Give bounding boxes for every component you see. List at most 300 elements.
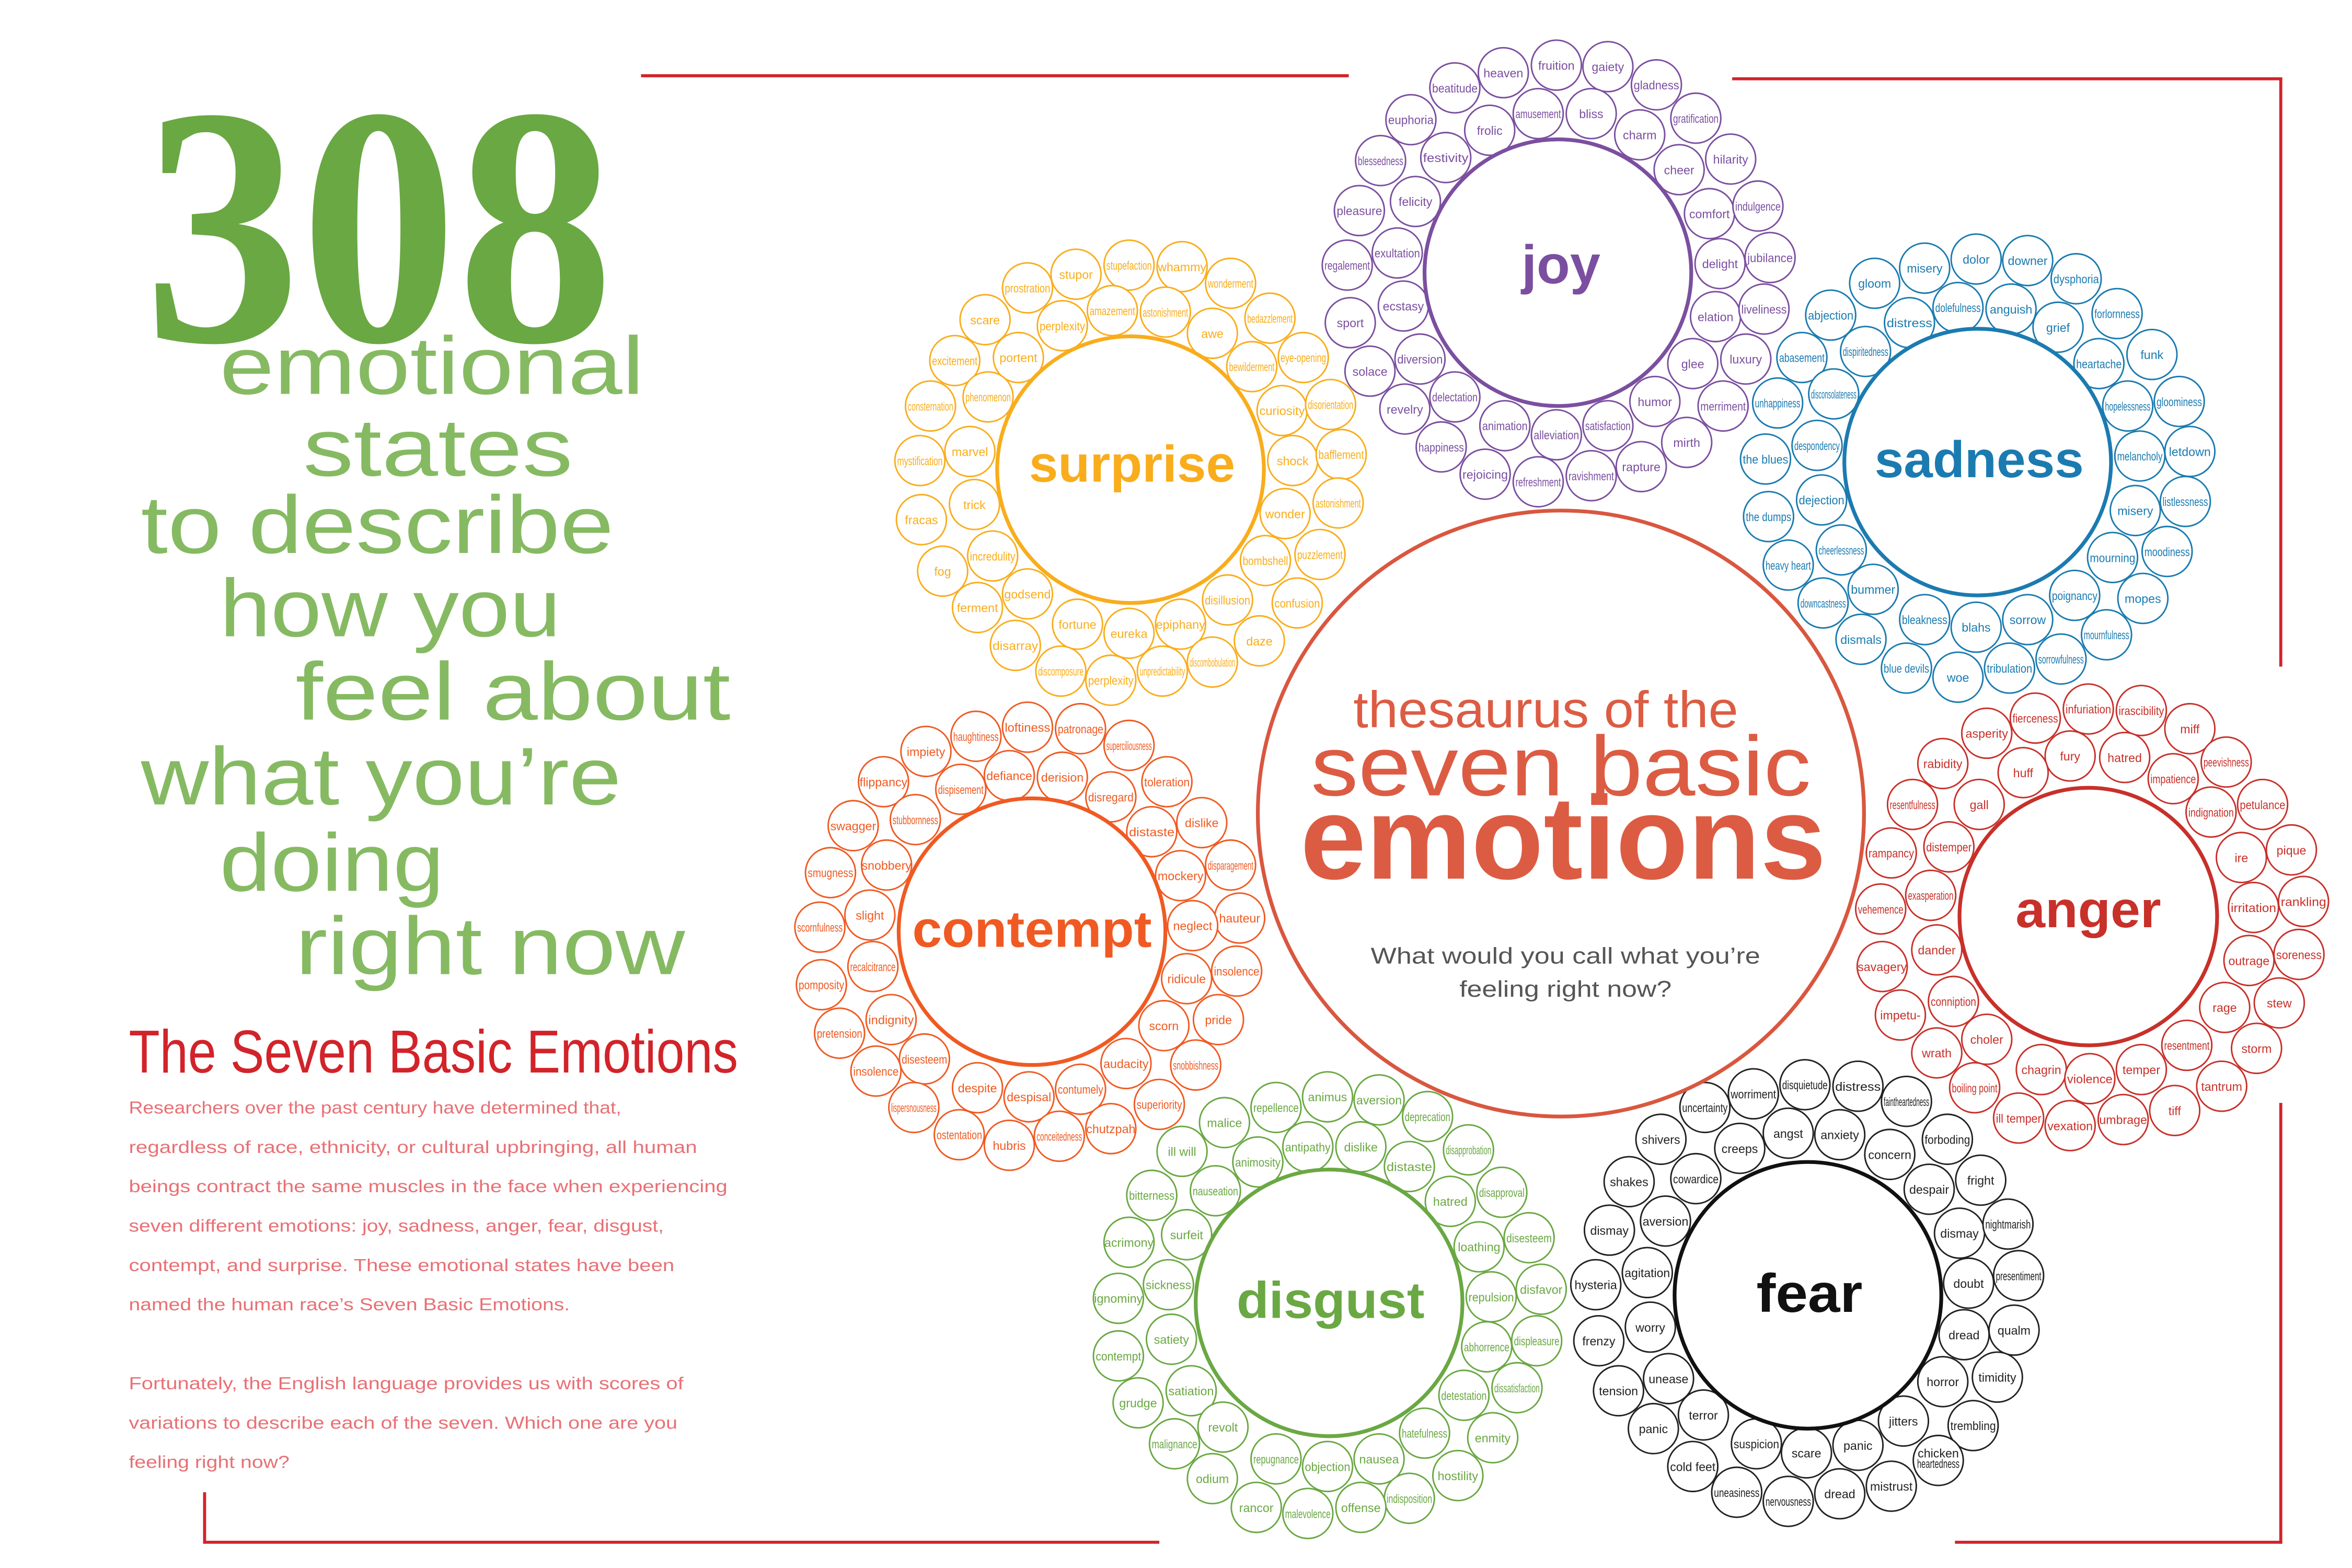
word bubbles: sadness: blahs	[1962, 621, 1991, 635]
word bubbles: surprise: astonishment	[1143, 306, 1189, 319]
word bubbles: joy: festivity	[1423, 151, 1469, 165]
paragraph text: named the human race’s Seven Basic Emotions.	[129, 1295, 570, 1315]
word bubbles: disgust: bitterness	[1129, 1189, 1174, 1203]
word bubbles: sadness: bummer	[1851, 583, 1896, 596]
circle: contempt	[898, 799, 1166, 1065]
word bubbles: fear: despair	[1909, 1183, 1949, 1196]
word bubbles: disgust: repulsion	[1469, 1290, 1514, 1304]
word bubbles: contempt: recalcitrance	[850, 960, 896, 974]
paragraph text: seven different emotions: joy, sadness, anger, fear, disgust,	[129, 1217, 664, 1236]
word bubbles: contempt: pomposity	[799, 978, 844, 992]
word bubbles: disgust: odium	[1196, 1472, 1229, 1486]
word bubbles: fear: anxiety	[1820, 1128, 1859, 1142]
word bubbles: joy: comfort	[1689, 207, 1730, 221]
word bubbles: anger: gall	[1970, 798, 1989, 812]
word bubbles: disgust: malevolence	[1285, 1507, 1331, 1520]
word bubbles: surprise: disillusion	[1205, 594, 1250, 607]
headline: emotional states to describe how you feel: emotional	[220, 320, 644, 412]
center circle: thesaurus of the seven basic emotions	[1258, 511, 1864, 1116]
word bubbles: surprise: eye-opening	[1281, 351, 1326, 365]
circle: sadness: sadness	[1875, 431, 2084, 488]
word bubbles: contempt: hubris	[993, 1139, 1026, 1152]
word bubbles: anger: conniption	[1931, 995, 1976, 1009]
word bubbles: anger: hatred	[2107, 751, 2142, 765]
word bubbles: joy: humor	[1638, 395, 1672, 409]
word bubbles: surprise: astonishment	[1316, 497, 1361, 510]
word bubbles: disgust: acrimony	[1104, 1236, 1154, 1250]
word bubbles: sadness: mournfulness	[2084, 628, 2129, 642]
word bubbles: surprise: trick	[963, 498, 986, 512]
word bubbles: fear: panic	[1639, 1422, 1668, 1436]
word bubbles: joy: revelry	[1387, 402, 1423, 416]
circle: surprise	[997, 336, 1264, 603]
word bubbles: fear: cowardice	[1673, 1172, 1719, 1186]
word bubbles: sadness: melancholy	[2117, 449, 2163, 463]
word bubbles: fear: creeps	[1722, 1142, 1758, 1156]
word bubbles: surprise: bewilderment	[1229, 360, 1275, 374]
word bubbles: disgust: hatefulness	[1402, 1427, 1447, 1440]
word bubbles: surprise: disorientation	[1308, 398, 1353, 412]
word bubbles: surprise: excitement	[932, 354, 978, 368]
word bubbles: anger: huff	[2013, 766, 2033, 780]
word bubbles: surprise: mystification	[897, 454, 942, 468]
word bubbles: disgust: disfavor	[1520, 1283, 1563, 1296]
word bubbles: sadness: misery	[2117, 504, 2153, 518]
word bubbles: joy: diversion	[1397, 353, 1443, 366]
word bubbles: fear: shakes	[1610, 1175, 1648, 1189]
word bubbles: anger: storm	[2241, 1042, 2272, 1055]
word bubbles: disgust: deprecation	[1405, 1110, 1450, 1124]
center circle: thesaurus of the seven basic emotions: What would you call what you’re	[1371, 943, 1760, 969]
word bubbles: sadness: dolor	[1963, 252, 1990, 266]
word bubbles: anger: miff	[2180, 722, 2200, 736]
word bubbles: fear: trembling	[1951, 1419, 1996, 1433]
circle: joy: joy	[1520, 235, 1600, 295]
word bubbles: sadness: sorrowfulness	[2038, 653, 2084, 666]
word bubbles: sadness: despondency	[1794, 439, 1840, 453]
word bubbles: contempt: snobbery	[861, 859, 912, 872]
word bubbles: joy: sport	[1337, 316, 1364, 330]
word bubbles: surprise: awe	[1201, 327, 1224, 340]
word bubbles: sadness: misery	[1907, 262, 1943, 275]
word bubbles: anger: rampancy	[1869, 847, 1914, 860]
word bubbles: fear: dismay	[1590, 1224, 1629, 1237]
word bubbles: fear: shivers	[1642, 1133, 1680, 1146]
word bubbles: sadness: forlornness	[2094, 307, 2140, 321]
word bubbles: surprise: godsend	[1004, 587, 1051, 601]
word bubbles: contempt: impiety	[907, 745, 946, 758]
word bubbles: joy: ravishment	[1569, 469, 1614, 483]
word bubbles: sadness: dispiritedness	[1843, 345, 1888, 359]
word bubbles: joy: solace	[1353, 365, 1388, 378]
circle: disgust	[1196, 1170, 1462, 1436]
word bubbles: surprise: perplexity	[1040, 319, 1085, 333]
word bubbles: joy: felicity	[1399, 195, 1433, 209]
word bubbles: disgust: repugnance	[1253, 1452, 1299, 1466]
word bubbles: joy: blessedness	[1358, 154, 1403, 168]
word bubbles: disgust: ill will	[1168, 1145, 1196, 1159]
word bubbles: anger: vexation	[2047, 1119, 2093, 1133]
word bubbles: anger: exasperation	[1908, 889, 1953, 903]
word bubbles: anger: savagery	[1858, 960, 1907, 974]
word bubbles: disgust: dislike	[1344, 1140, 1378, 1154]
word bubbles: joy: heaven	[1483, 66, 1523, 80]
word bubbles: fear: jitters	[1888, 1415, 1918, 1428]
word bubbles: joy: euphoria	[1388, 113, 1434, 127]
word bubbles: joy: ecstasy	[1383, 299, 1424, 313]
word bubbles: surprise: discombobulation	[1190, 655, 1235, 669]
word bubbles: fear: aversion	[1643, 1215, 1688, 1228]
center circle: thesaurus of the seven basic emotions: seven basic	[1311, 719, 1811, 814]
word bubbles: sadness: distress	[1887, 316, 1932, 330]
word bubbles: surprise: epiphany	[1156, 618, 1205, 631]
word bubbles: disgust: animosity	[1235, 1156, 1281, 1169]
circle: anger	[1959, 788, 2217, 1045]
word bubbles: disgust: detestation	[1441, 1389, 1486, 1402]
word bubbles: surprise: fortune	[1058, 618, 1097, 631]
word bubbles: joy: luxury	[1730, 353, 1762, 366]
word bubbles: anger: impatience	[2150, 773, 2196, 786]
word bubbles: contempt: insolence	[1214, 965, 1259, 978]
paragraph text: beings contract the same muscles in the face when experiencing	[129, 1177, 728, 1196]
word bubbles: joy: delight	[1702, 257, 1738, 271]
word bubbles: surprise: puzzlement	[1297, 548, 1343, 562]
word bubbles: joy: refreshment	[1515, 475, 1561, 489]
word bubbles: anger: vehemence	[1858, 903, 1904, 916]
word bubbles: sadness: blue devils	[1884, 662, 1929, 675]
word bubbles: surprise: prostration	[1005, 281, 1050, 295]
word bubbles: surprise: wonder	[1265, 507, 1305, 521]
word bubbles: contempt: despite	[958, 1081, 997, 1095]
headline: emotional states to describe how you feel: to describe	[141, 479, 614, 571]
word bubbles: anger: wrath	[1921, 1046, 1952, 1060]
word bubbles: disgust: nausea	[1359, 1452, 1399, 1466]
word bubbles: contempt: lispersnousness	[891, 1101, 937, 1115]
circle: joy	[1425, 140, 1691, 406]
word bubbles: disgust: sickness	[1146, 1278, 1191, 1292]
word bubbles: surprise: portent	[999, 351, 1037, 365]
paragraph text	[129, 1098, 728, 1472]
word bubbles: anger: irritation	[2231, 901, 2276, 915]
word bubbles: fear: concern	[1868, 1148, 1911, 1161]
word bubbles: contempt: contumely	[1058, 1083, 1103, 1097]
word bubbles: sadness: abasement	[1779, 351, 1825, 365]
word bubbles: anger: distemper	[1926, 840, 1971, 854]
word bubbles: anger: fierceness	[2013, 712, 2058, 725]
word bubbles: contempt: haughtiness	[953, 730, 999, 743]
circle: surprise: surprise	[1029, 435, 1235, 493]
word bubbles: fear: nightmarish	[1985, 1218, 2031, 1231]
word bubbles: fear: worriment	[1730, 1087, 1777, 1101]
word bubbles: surprise	[895, 240, 1366, 705]
word bubbles: joy: animation	[1482, 419, 1528, 433]
headline: emotional states to describe how you feel: doing	[220, 817, 444, 908]
word bubbles: disgust: grudge	[1119, 1397, 1157, 1410]
word bubbles: disgust: malignance	[1152, 1437, 1197, 1451]
word bubbles: contempt: stubbornness	[893, 813, 938, 827]
word bubbles: contempt: distaste	[1129, 825, 1174, 839]
word bubbles: anger: irascibility	[2118, 704, 2164, 718]
word bubbles: anger: violence	[2067, 1072, 2113, 1086]
word bubbles: joy: delectation	[1432, 390, 1478, 404]
word bubbles: fear: nervousness	[1766, 1495, 1811, 1508]
word bubbles: disgust: repellence	[1253, 1101, 1299, 1115]
word bubbles: anger: petulance	[2240, 798, 2285, 812]
word bubbles: joy: merriment	[1700, 400, 1746, 413]
word bubbles: surprise: daze	[1246, 635, 1273, 648]
word bubbles: contempt: superiority	[1137, 1098, 1182, 1112]
word bubbles: contempt: despisal	[1007, 1090, 1051, 1104]
word bubbles: sadness: gloom	[1858, 277, 1891, 291]
word bubbles: disgust: antipathy	[1285, 1140, 1331, 1154]
word bubbles: fear: hysteria	[1575, 1278, 1617, 1292]
word bubbles: joy: liveliness	[1742, 303, 1786, 316]
word bubbles: fear: presentiment	[1996, 1269, 2042, 1283]
word bubbles: disgust: offense	[1341, 1501, 1381, 1515]
word bubbles: joy: regalement	[1324, 259, 1370, 272]
word bubbles: contempt: dislike	[1185, 816, 1219, 830]
word bubbles: disgust	[1093, 1072, 1566, 1538]
title: The Seven Basic Emotions: The Seven Basic Emotions	[129, 1018, 738, 1086]
word bubbles: disgust: disesteem	[1506, 1231, 1552, 1245]
word bubbles: joy: fruition	[1538, 59, 1575, 72]
word bubbles: disgust: indisposition	[1387, 1492, 1432, 1505]
word bubbles: surprise: eureka	[1111, 627, 1148, 640]
word bubbles: joy: pleasure	[1336, 204, 1382, 218]
word bubbles: surprise: consternation	[908, 400, 953, 413]
word bubbles: joy: cheer	[1664, 163, 1694, 177]
word bubbles: contempt: hauteur	[1219, 912, 1260, 925]
word bubbles: sadness: poignancy	[2052, 589, 2097, 603]
word bubbles: fear: suspicion	[1734, 1437, 1779, 1451]
word bubbles: contempt: pride	[1205, 1013, 1232, 1027]
word bubbles: sadness: hopelessness	[2105, 400, 2150, 413]
word bubbles: fear: dismay	[1940, 1227, 1979, 1240]
word bubbles: joy: rapture	[1622, 460, 1661, 474]
word bubbles: fear: chicken	[1918, 1446, 1959, 1460]
word bubbles: anger: asperity	[1966, 727, 2008, 741]
word bubbles: disgust: ignominy	[1094, 1292, 1143, 1306]
word bubbles: sadness	[1740, 234, 2215, 702]
word bubbles: surprise: disarray	[993, 639, 1039, 652]
word bubbles: disgust: contempt	[1096, 1350, 1142, 1363]
word bubbles: sadness: mourning	[2090, 551, 2135, 564]
word bubbles: fear: disquietude	[1782, 1078, 1828, 1092]
word bubbles: contempt: ostentation	[937, 1128, 982, 1142]
word bubbles: fear: uncertainty	[1682, 1101, 1728, 1115]
word bubbles: fear: distress	[1835, 1080, 1881, 1093]
circle: disgust: disgust	[1237, 1272, 1425, 1329]
word bubbles: surprise: discomposure	[1038, 665, 1083, 678]
word bubbles: sadness: dysphoria	[2054, 272, 2099, 286]
paragraph text: regardless of race, ethnicity, or cultural upbringing, all human	[129, 1138, 697, 1157]
word bubbles: disgust: revolt	[1208, 1421, 1238, 1434]
word bubbles: disgust: malice	[1207, 1116, 1242, 1130]
center circle: thesaurus of the seven basic emotions: feeling right now?	[1459, 977, 1671, 1002]
word bubbles: surprise: wonderment	[1207, 277, 1253, 291]
word bubbles: disgust: hostility	[1438, 1469, 1478, 1483]
word bubbles: sadness: the blues	[1743, 453, 1788, 466]
word bubbles: joy	[1322, 40, 1795, 507]
word bubbles: sadness: funk	[2140, 348, 2164, 362]
word bubbles: contempt: superciliousness	[1106, 739, 1152, 753]
word bubbles: joy: beatitude	[1432, 82, 1478, 95]
word bubbles: sadness: dejection	[1799, 493, 1844, 507]
word bubbles: surprise: bafflement	[1319, 448, 1364, 462]
word bubbles: sadness: heartache	[2076, 357, 2122, 371]
word bubbles: contempt: insolence	[853, 1065, 898, 1078]
word bubbles: disgust: rancor	[1239, 1501, 1274, 1515]
word bubbles: surprise: shock	[1277, 454, 1309, 468]
word bubbles: contempt: snobbishness	[1173, 1058, 1218, 1072]
paragraph text: Researchers over the past century have determined that,	[129, 1098, 621, 1117]
word bubbles: contempt: indignity	[868, 1013, 914, 1027]
word bubbles: contempt: disesteem	[902, 1053, 947, 1066]
word bubbles: anger: rabidity	[1923, 757, 1963, 771]
word bubbles: surprise: fracas	[905, 513, 938, 527]
headline: emotional states to describe how you feel: feel about	[295, 646, 731, 737]
word bubbles: disgust: animus	[1308, 1090, 1347, 1104]
word bubbles: fear: panic	[1843, 1439, 1872, 1452]
word bubbles: disgust: disapprobation	[1446, 1144, 1491, 1157]
word bubbles: joy: glee	[1681, 357, 1704, 371]
word bubbles: disgust: abhorrence	[1464, 1341, 1509, 1354]
word bubbles: anger: rage	[2212, 1001, 2237, 1014]
word bubbles: sadness: downcastness	[1801, 596, 1846, 610]
word bubbles: sadness: bleakness	[1902, 613, 1947, 627]
word bubbles: contempt: scornfulness	[797, 921, 843, 935]
word bubbles: fear: angst	[1773, 1127, 1803, 1140]
word bubbles: fear: dread	[1949, 1328, 1979, 1342]
word bubbles: joy: elation	[1698, 310, 1733, 324]
word bubbles: joy: bliss	[1579, 107, 1604, 121]
word bubbles: sadness: dismals	[1840, 633, 1882, 647]
word bubbles: sadness: abjection	[1808, 309, 1853, 322]
word bubbles: joy: frolic	[1477, 124, 1503, 137]
word bubbles: anger: pique	[2277, 844, 2306, 857]
word bubbles: contempt: loftiness	[1005, 721, 1050, 734]
word bubbles: fear: qualm	[1998, 1324, 2031, 1338]
word bubbles: fear: heartedness	[1917, 1457, 1959, 1471]
word bubbles: joy: gaiety	[1592, 60, 1624, 74]
word bubbles: fear: frenzy	[1582, 1334, 1616, 1348]
headline: emotional states to describe how you feel: how you	[220, 562, 561, 654]
word bubbles: contempt: flippancy	[860, 775, 908, 789]
word bubbles: surprise: bedazzlement	[1247, 312, 1293, 325]
word bubbles: sadness: gloominess	[2157, 395, 2202, 409]
word bubbles: fear: terror	[1689, 1409, 1718, 1422]
word bubbles: sadness: the dumps	[1746, 510, 1791, 524]
word bubbles: fear: faintheartedness	[1884, 1095, 1929, 1109]
word bubbles: sadness: anguish	[1990, 303, 2032, 316]
word bubbles: disgust: hatred	[1433, 1195, 1468, 1208]
word bubbles: anger: temper	[2123, 1063, 2160, 1077]
word bubbles: anger: indignation	[2188, 805, 2234, 819]
word bubbles: fear: mistrust	[1870, 1480, 1913, 1493]
word bubbles: anger: rankling	[2281, 895, 2326, 908]
headline: emotional states to describe how you feel: what you’re	[141, 731, 621, 822]
word bubbles: fear: worry	[1635, 1321, 1665, 1334]
headline: emotional states to describe how you feel	[141, 320, 731, 992]
word bubbles: sadness: listlessness	[2163, 495, 2208, 509]
word bubbles: contempt: derision	[1041, 771, 1083, 785]
circle: anger: anger	[2015, 881, 2161, 938]
word bubbles: surprise: ferment	[957, 601, 998, 615]
circle: fear	[1675, 1162, 1941, 1428]
word bubbles: disgust: nauseation	[1193, 1184, 1238, 1198]
word bubbles: sadness: downer	[2008, 254, 2048, 268]
word bubbles: joy: mirth	[1673, 436, 1700, 449]
word bubbles: fear: dread	[1824, 1488, 1855, 1501]
word bubbles: anger: infuriation	[2066, 702, 2111, 716]
word bubbles: joy: satisfaction	[1585, 419, 1631, 433]
word bubbles: disgust: enmity	[1475, 1431, 1511, 1445]
word bubbles: fear: tension	[1599, 1385, 1638, 1398]
word bubbles: fear: uneasiness	[1714, 1486, 1759, 1500]
word bubbles: sadness: sorrow	[2010, 613, 2046, 627]
word bubbles: anger: tantrum	[2201, 1080, 2242, 1093]
word bubbles: anger: tiff	[2169, 1104, 2181, 1117]
word bubbles: fear: forboding	[1924, 1133, 1970, 1146]
word bubbles: contempt: slight	[856, 908, 884, 922]
word bubbles: sadness: dolefulness	[1935, 301, 1981, 315]
center circle: thesaurus of the seven basic emotions: emotions	[1300, 771, 1826, 904]
word bubbles: fear: cold feet	[1670, 1460, 1716, 1473]
word bubbles: anger: chagrin	[2022, 1063, 2061, 1077]
word bubbles: joy: hilarity	[1713, 153, 1748, 166]
word bubbles: anger: ire	[2234, 851, 2248, 864]
word bubbles: contempt: chutzpah	[1086, 1122, 1135, 1136]
word bubbles: contempt: disparagement	[1208, 859, 1253, 872]
word bubbles: anger: soreness	[2276, 948, 2322, 962]
word bubbles: disgust: satiation	[1169, 1385, 1214, 1398]
word bubbles: fear: timidity	[1978, 1370, 2016, 1384]
word bubbles: contempt: ridicule	[1168, 972, 1206, 986]
paragraph text: contempt, and surprise. These emotional states have been	[129, 1256, 674, 1275]
circle: fear: fear	[1757, 1263, 1862, 1324]
word bubbles: disgust: objection	[1305, 1460, 1350, 1473]
word bubbles: anger: outrage	[2229, 954, 2269, 967]
word bubbles: fear: horror	[1927, 1375, 1959, 1389]
word bubbles: anger: boiling point	[1952, 1081, 1998, 1095]
word bubbles: joy: happiness	[1419, 441, 1464, 454]
paragraph text: Fortunately, the English language provides us with scores of	[129, 1374, 684, 1393]
word bubbles: joy: jubilance	[1747, 251, 1793, 264]
word bubbles: contempt: defiance	[986, 769, 1032, 783]
word bubbles: contempt: dispisement	[938, 783, 984, 797]
word bubbles: sadness: letdown	[2169, 445, 2211, 458]
word bubbles: surprise: bombshell	[1243, 554, 1288, 568]
word bubbles: anger	[1855, 684, 2328, 1150]
word bubbles: joy: alleviation	[1534, 429, 1579, 442]
word bubbles: surprise: confusion	[1274, 596, 1320, 610]
word bubbles: surprise: fog	[934, 564, 951, 578]
word bubbles: joy: rejoicing	[1462, 468, 1508, 481]
word bubbles: sadness: disconsolateness	[1811, 387, 1857, 401]
center circle: thesaurus of the seven basic emotions: thesaurus of the	[1353, 681, 1738, 738]
word bubbles: surprise: unpredictability	[1139, 665, 1185, 678]
word bubbles: joy: exultation	[1375, 247, 1420, 260]
word bubbles: anger: dander	[1918, 943, 1956, 957]
word bubbles: contempt: toleration	[1144, 775, 1190, 789]
word bubbles: surprise: marvel	[952, 445, 988, 458]
word bubbles: disgust: disapproval	[1479, 1186, 1525, 1200]
word bubbles: disgust: loathing	[1458, 1240, 1501, 1254]
word bubbles: surprise: perplexity	[1088, 674, 1134, 687]
word bubbles: surprise: amazement	[1090, 304, 1135, 318]
word bubbles: contempt	[795, 702, 1265, 1170]
word bubbles: contempt: mockery	[1158, 869, 1204, 883]
